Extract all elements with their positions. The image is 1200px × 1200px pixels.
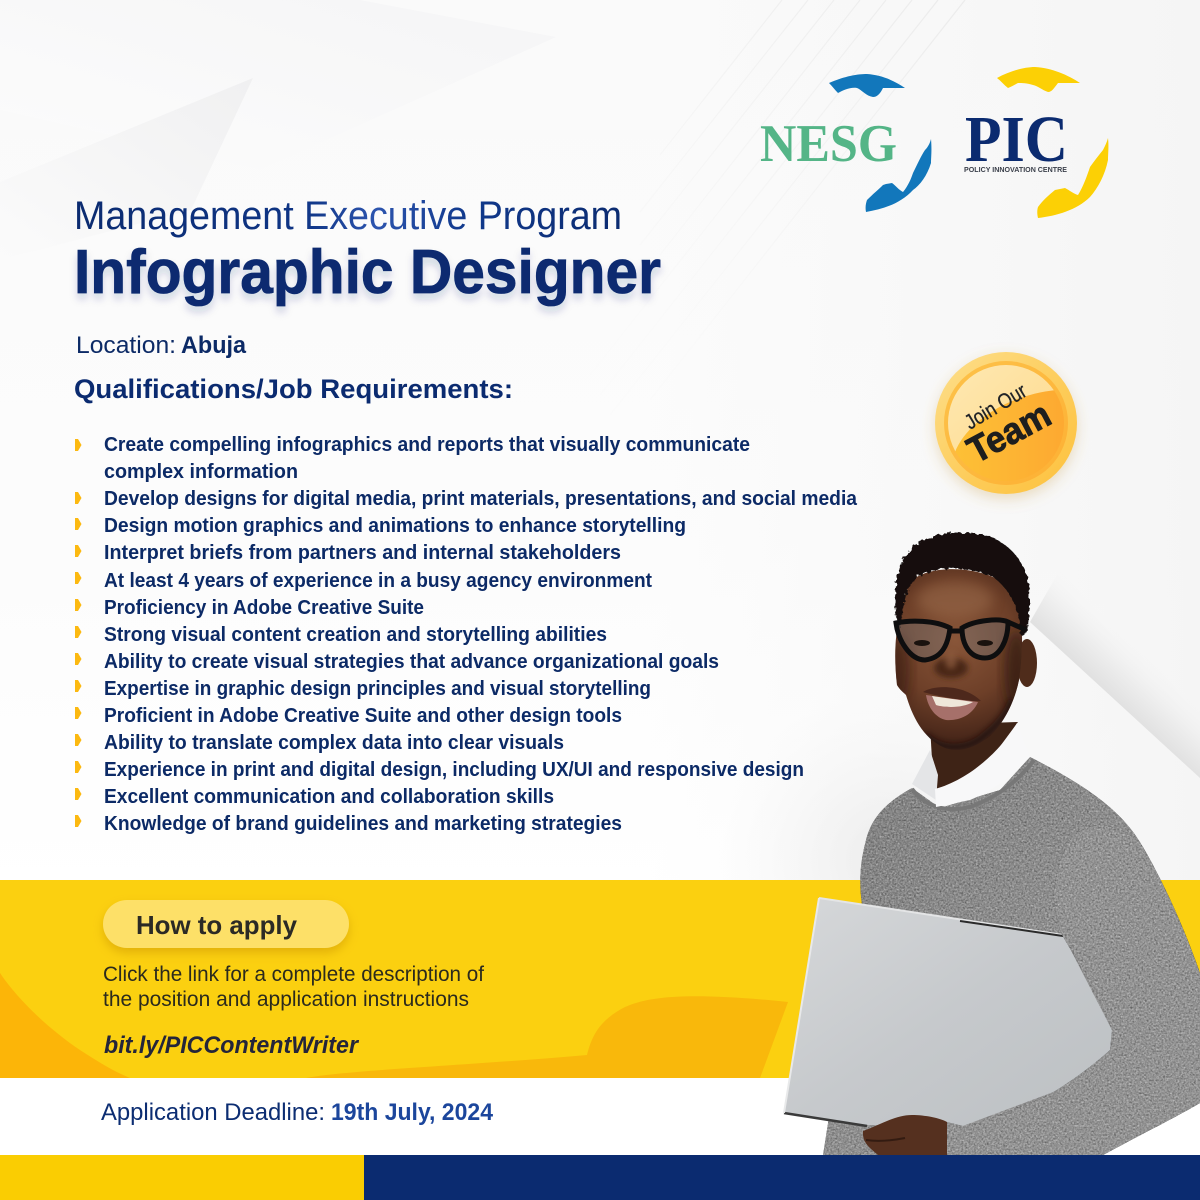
logo: NESG: NESG <box>760 115 897 173</box>
figure: face <box>895 569 1022 750</box>
figure: glasses <box>896 620 1026 660</box>
title: program line: Management Executive Program <box>74 194 622 238</box>
logo: NESG <box>760 74 931 212</box>
how to apply pill: How to apply <box>136 910 298 940</box>
application deadline <box>101 1099 493 1126</box>
application deadline: 19th July, 2024 <box>331 1099 493 1126</box>
location line <box>76 332 247 359</box>
bullet row 1: complex information <box>104 460 298 483</box>
apply link: bit.ly/PICContentWriter <box>104 1032 359 1059</box>
location line: Location: <box>76 332 176 359</box>
bullet row 4: Interpret briefs from partners and internal stakeholders <box>104 541 621 564</box>
badge: join our team: Join Our <box>961 380 1031 434</box>
background shard: right grey <box>1030 500 1200 778</box>
band accent: left curve <box>0 973 130 1078</box>
bullet row 14: Knowledge of brand guidelines and marketing strategies <box>104 812 622 835</box>
bullet row 7: Strong visual content creation and storytelling abilities <box>104 623 607 646</box>
figure: neck <box>930 722 1018 798</box>
how to apply pill <box>103 900 349 948</box>
figure: right collar <box>935 723 1030 807</box>
figure: sleeve <box>947 825 1200 1155</box>
apply instructions <box>103 962 484 1011</box>
footer bar: navy <box>364 1155 1200 1200</box>
bullet row 10: Proficient in Adobe Creative Suite and other design tools <box>104 704 622 727</box>
background right tint <box>650 0 1200 880</box>
bullet row 12: Experience in print and digital design, including UX/UI and responsive design <box>104 758 804 781</box>
bullet row 1 <box>75 433 750 483</box>
bullet row 13: Excellent communication and collaboration skills <box>104 785 554 808</box>
band accent: right swoosh <box>306 996 788 1078</box>
bullet row 11: Ability to translate complex data into clear visuals <box>104 731 564 754</box>
title: job role: Infographic Designer <box>74 238 661 307</box>
logo: PIC <box>964 67 1108 218</box>
white deadline band <box>0 1078 1200 1155</box>
bullet row 3: Design motion graphics and animations to enhance storytelling <box>104 514 686 537</box>
background shard: upper wedge <box>0 0 556 170</box>
figure: sweater torso <box>823 757 1200 1155</box>
figure: eyes <box>914 640 993 646</box>
footer bar: yellow <box>0 1155 364 1200</box>
bullet row 9: Expertise in graphic design principles and visual storytelling <box>104 677 651 700</box>
figure: mouth <box>923 687 981 720</box>
application deadline: Application Deadline: <box>101 1099 325 1126</box>
bullet row 5: At least 4 years of experience in a busy agency environment <box>104 569 652 592</box>
figure: sweater neckline <box>912 760 1034 809</box>
apply instructions: the position and application instructions <box>103 987 469 1011</box>
apply instructions: Click the link for a complete description of <box>103 962 484 986</box>
figure: nose <box>934 651 968 678</box>
figure: hand <box>863 1115 947 1155</box>
figure: ear <box>1017 639 1037 687</box>
figure: man with laptop <box>784 532 1200 1155</box>
badge: join our team <box>935 352 1077 494</box>
figure: hair <box>895 532 1030 636</box>
figure: laptop <box>784 898 1112 1127</box>
bullet row 8: Ability to create visual strategies that advance organizational goals <box>104 650 719 673</box>
bullet row 1: Create compelling infographics and reports that visually communicate <box>104 433 750 456</box>
bullet row 2: Develop designs for digital media, print materials, presentations, and social media <box>104 487 858 510</box>
badge: join our team: Team <box>961 394 1057 471</box>
figure: left collar <box>912 750 938 800</box>
yellow apply band <box>0 880 1200 1078</box>
requirements list <box>75 433 858 835</box>
background soft shade near figure <box>700 690 1040 880</box>
bullet row 6: Proficiency in Adobe Creative Suite <box>104 596 424 619</box>
requirements heading: Qualifications/Job Requirements: <box>74 374 513 404</box>
logo: PIC: PIC <box>965 103 1068 176</box>
logo: PIC: POLICY INNOVATION CENTRE <box>964 165 1067 174</box>
location line: Abuja <box>181 332 247 359</box>
background diagonal stripes <box>590 0 965 415</box>
background shard: left triangle <box>0 78 253 260</box>
